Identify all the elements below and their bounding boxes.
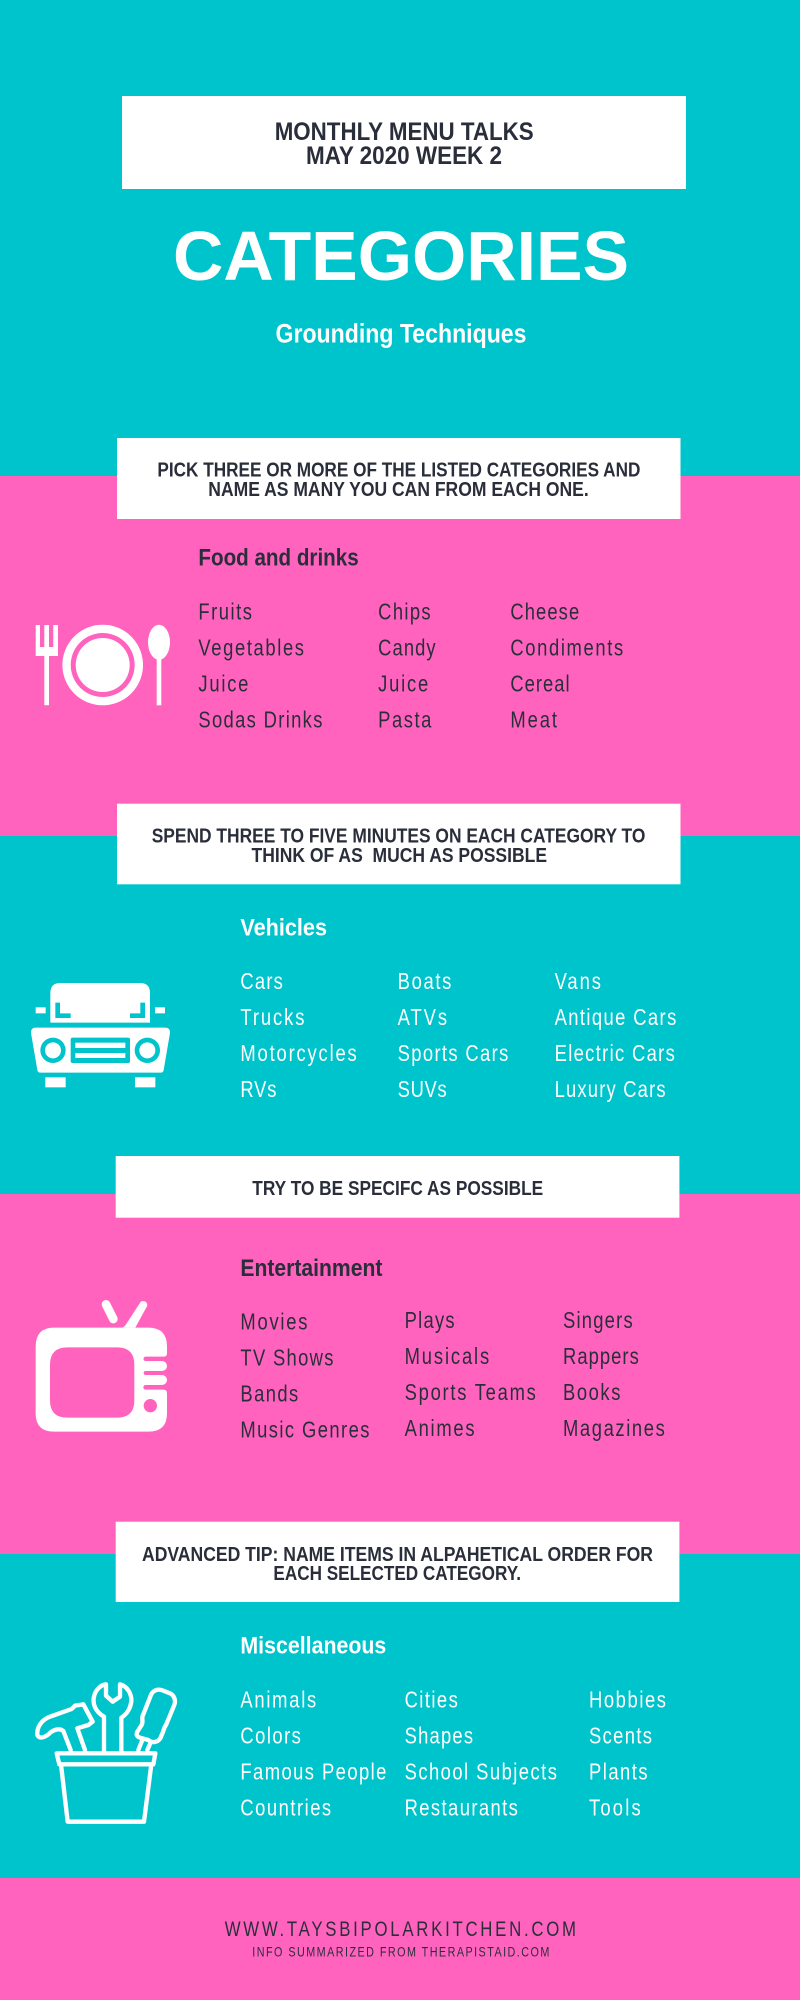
list: miscellaneous items: Famous People <box>240 1759 386 1785</box>
list: food items: Condiments <box>510 635 623 661</box>
list: food items: Sodas Drinks <box>198 707 322 733</box>
list: food items: Cereal <box>510 671 570 697</box>
footer: WWW.TAYSBIPOLARKITCHEN.COM <box>225 1918 576 1942</box>
list: entertainment items: Singers <box>563 1308 633 1334</box>
panel: vehicles <box>31 914 676 1103</box>
list: vehicle items: Boats <box>398 969 451 995</box>
list: vehicle items: Sports Cars <box>398 1041 508 1067</box>
list: entertainment items: Plays <box>405 1308 455 1334</box>
list: vehicle items: ATVs <box>398 1005 447 1031</box>
icon: car front <box>31 983 170 1087</box>
instruction box 4: EACH SELECTED CATEGORY. <box>273 1563 521 1585</box>
heading: entertainment: Entertainment <box>240 1255 382 1282</box>
list: food items: Pasta <box>378 707 432 733</box>
list: miscellaneous items: Hobbies <box>589 1687 666 1713</box>
list: food items: Juice <box>378 671 428 697</box>
list: vehicle items: SUVs <box>398 1077 447 1103</box>
background band: pink food <box>0 476 800 836</box>
list: entertainment items: Movies <box>240 1309 307 1335</box>
instruction box 3 <box>116 1156 679 1218</box>
instruction box 4: ADVANCED TIP: NAME ITEMS IN ALPAHETICAL ORDER FOR <box>142 1544 653 1566</box>
icon: tool bucket <box>37 1684 175 1822</box>
list: miscellaneous items: Colors <box>240 1723 301 1749</box>
list: miscellaneous items: Plants <box>589 1759 648 1785</box>
instruction box 2: SPEND THREE TO FIVE MINUTES ON EACH CATEGORY TO <box>152 826 645 848</box>
instruction box 1: NAME AS MANY YOU CAN FROM EACH ONE. <box>208 479 589 501</box>
list: vehicle items: Luxury Cars <box>555 1077 666 1103</box>
panel: entertainment <box>36 1255 665 1443</box>
background band: pink footer <box>0 1878 800 2000</box>
background band: teal header <box>0 0 800 476</box>
instruction box 1: PICK THREE OR MORE OF THE LISTED CATEGORIES AND <box>157 460 640 482</box>
list: entertainment items: Bands <box>240 1381 298 1407</box>
list: miscellaneous items: Tools <box>589 1795 641 1821</box>
background band: teal miscellaneous <box>0 1554 800 1878</box>
list: entertainment items: Books <box>563 1380 620 1406</box>
instruction box 3: TRY TO BE SPECIFC AS POSSIBLE <box>252 1178 543 1200</box>
list: entertainment items <box>240 1308 665 1443</box>
header banner <box>122 96 686 189</box>
list: food items: Vegetables <box>198 635 304 661</box>
list: entertainment items: Animes <box>405 1416 475 1442</box>
list: vehicle items: Electric Cars <box>555 1041 675 1067</box>
list: food items: Cheese <box>510 599 579 625</box>
instruction box 2 <box>117 804 680 884</box>
list: miscellaneous items: School Subjects <box>405 1759 557 1785</box>
list: vehicle items: Vans <box>555 969 601 995</box>
list: miscellaneous items <box>240 1687 666 1821</box>
list: miscellaneous items: Scents <box>589 1723 652 1749</box>
heading: miscellaneous: Miscellaneous <box>240 1632 386 1659</box>
list: vehicle items: Trucks <box>240 1005 304 1031</box>
list: entertainment items: Musicals <box>405 1344 489 1370</box>
list: entertainment items: Music Genres <box>240 1417 369 1443</box>
heading: food and drinks: Food and drinks <box>198 544 359 571</box>
list: entertainment items: Rappers <box>563 1344 639 1370</box>
list: miscellaneous items: Restaurants <box>405 1795 518 1821</box>
header banner: MAY 2020 WEEK 2 <box>306 142 502 170</box>
icon: television <box>36 1301 167 1432</box>
panel: food and drinks <box>36 544 623 733</box>
list: food items: Meat <box>510 707 557 733</box>
background band: pink entertainment <box>0 1194 800 1554</box>
list: miscellaneous items: Shapes <box>405 1723 473 1749</box>
instruction box 1 <box>117 438 680 519</box>
list: vehicle items: Antique Cars <box>555 1005 676 1031</box>
list: food items <box>198 599 623 733</box>
list: entertainment items: Sports Teams <box>405 1380 536 1406</box>
list: food items: Candy <box>378 635 436 661</box>
list: food items: Juice <box>198 671 248 697</box>
list: food items: Chips <box>378 599 431 625</box>
list: miscellaneous items: Countries <box>240 1795 331 1821</box>
heading: vehicles: Vehicles <box>240 914 327 941</box>
list: vehicle items: Cars <box>240 969 283 995</box>
title: CATEGORIES <box>173 217 629 295</box>
background band: teal vehicles <box>0 836 800 1194</box>
list: vehicle items <box>240 969 676 1103</box>
list: entertainment items: Magazines <box>563 1416 665 1442</box>
footer: INFO SUMMARIZED FROM THERAPISTAID.COM <box>252 1945 549 1960</box>
icon: plate, fork and spoon <box>36 625 170 705</box>
instruction box 2: THINK OF AS MUCH AS POSSIBLE <box>252 845 547 867</box>
header banner: MONTHLY MENU TALKS <box>275 118 534 146</box>
panel: miscellaneous <box>37 1632 666 1822</box>
list: miscellaneous items: Cities <box>405 1687 458 1713</box>
list: vehicle items: Motorcycles <box>240 1041 357 1067</box>
list: food items: Fruits <box>198 599 252 625</box>
footer <box>225 1918 576 1960</box>
list: miscellaneous items: Animals <box>240 1687 316 1713</box>
list: entertainment items: TV Shows <box>240 1345 333 1371</box>
instruction box 4 <box>116 1522 679 1602</box>
list: vehicle items: RVs <box>240 1077 276 1103</box>
subtitle: Grounding Techniques <box>276 319 526 349</box>
